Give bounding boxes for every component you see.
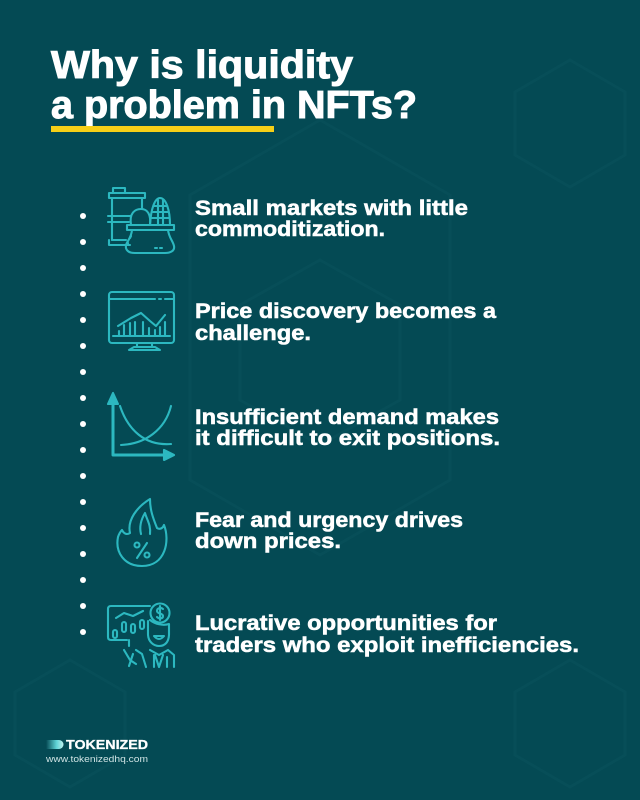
text: lucrative opportunities: Lucrative opportunities for: [195, 611, 498, 635]
text: fear and urgency: down prices.: [195, 529, 341, 553]
text: price discovery: Price discovery becomes a: [195, 299, 497, 323]
text: price discovery: [195, 299, 497, 345]
icon: trader with chart and dollar coin: [108, 604, 174, 667]
title: a problem in NFTs?: [51, 84, 417, 127]
title: Why is liquidity: [51, 44, 353, 87]
dotted timeline: [80, 213, 86, 635]
icon: monitor with chart: [109, 292, 174, 350]
logo wordmark: TOKENIZED: [66, 738, 148, 752]
text: small markets: [195, 196, 468, 241]
text: insufficient demand: it difficult to exit positions.: [195, 426, 500, 450]
title underline: [51, 126, 274, 132]
text: fear and urgency: Fear and urgency drives: [195, 508, 463, 532]
text: insufficient demand: [195, 405, 500, 450]
text: insufficient demand: Insufficient demand makes: [195, 405, 499, 429]
text: price discovery: challenge.: [195, 321, 311, 345]
website url: www.tokenizedhq.com: [45, 754, 148, 765]
icon: flame with percent: [117, 499, 166, 566]
title: [51, 44, 417, 127]
icon: commodities barrel and sack: [108, 188, 174, 253]
logo mark: [46, 740, 64, 749]
text: lucrative opportunities: [195, 611, 579, 657]
text: small markets: commoditization.: [195, 217, 385, 241]
text: lucrative opportunities: traders who exploit inefficiencies.: [195, 633, 579, 657]
icon: supply and demand curves: [108, 393, 174, 460]
text: small markets: Small markets with little: [195, 196, 468, 220]
text: fear and urgency: [195, 508, 463, 553]
